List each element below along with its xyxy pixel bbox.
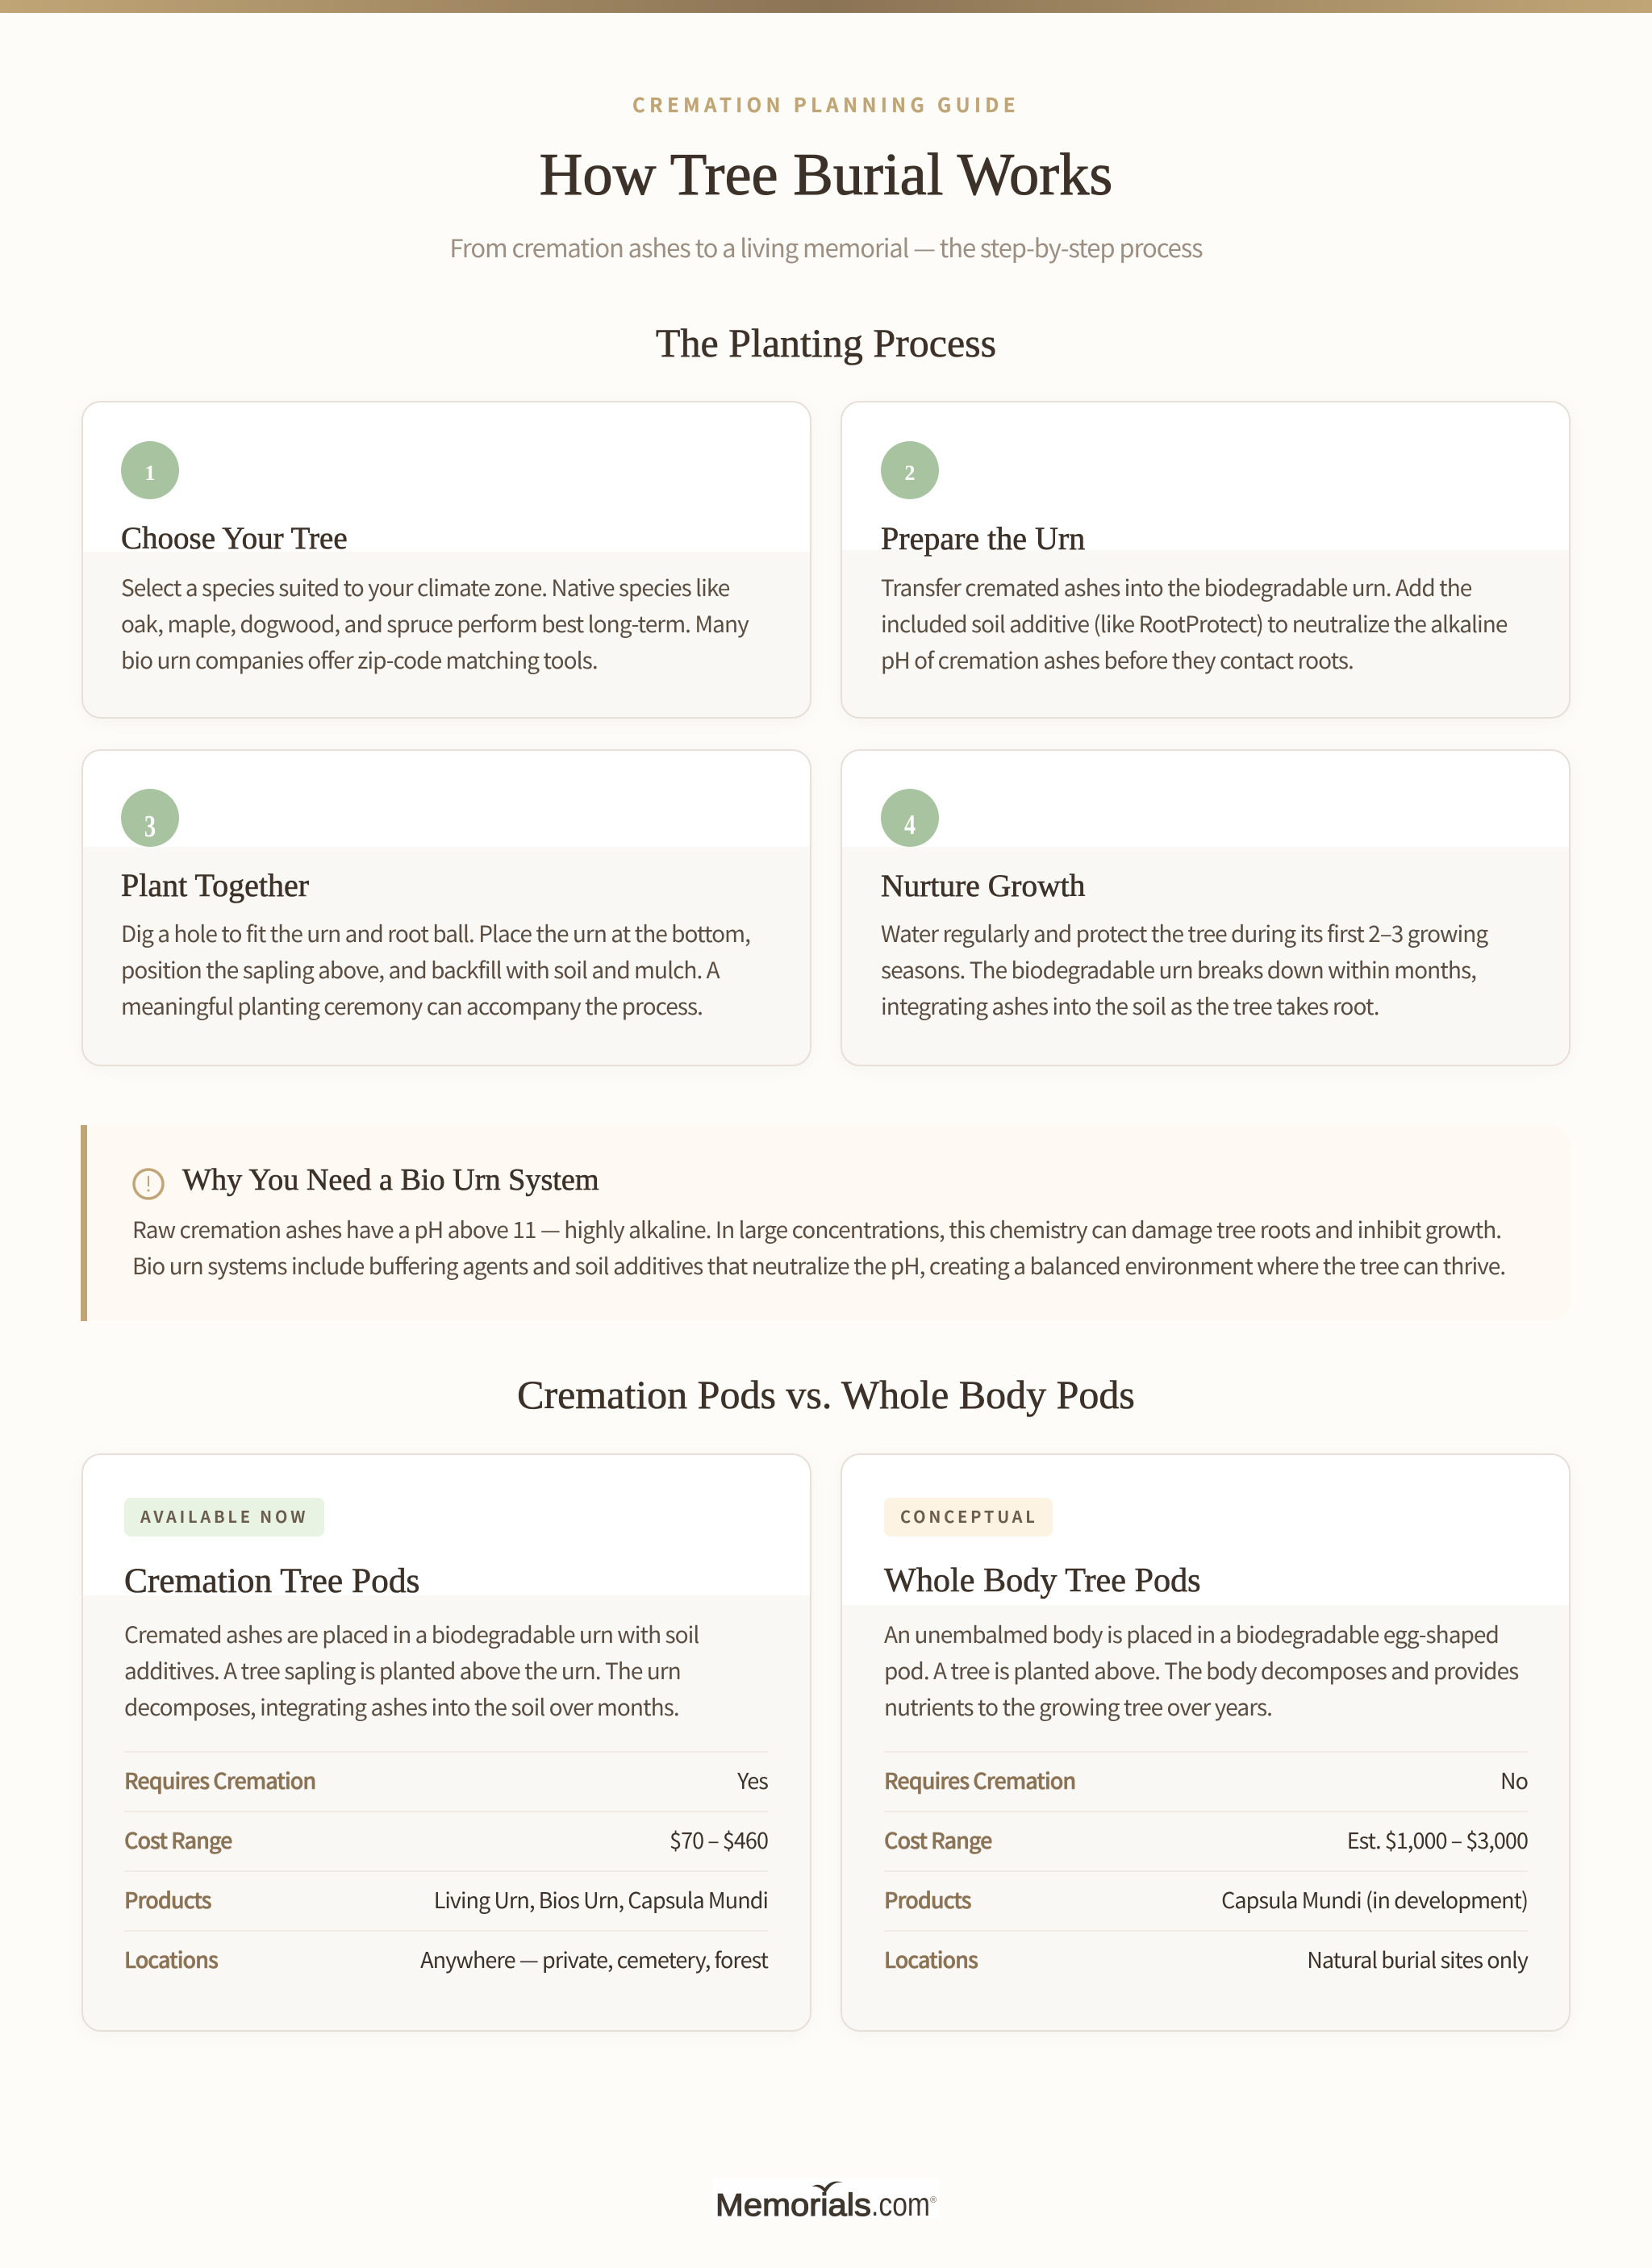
whole body pods data table: Products — [884, 1883, 971, 1915]
cremation pods data table — [124, 1751, 768, 1974]
cremation pods text: decomposes, integrating ashes into the soil over months. — [124, 1691, 679, 1723]
step 1 heading: Choose Your Tree — [121, 521, 348, 556]
cremation pods text — [124, 1618, 699, 1723]
cremation pods data table: Yes — [737, 1764, 768, 1795]
step number 4: 4 — [904, 809, 916, 840]
heading: the planting process: The Planting Process — [656, 320, 996, 365]
panel: step 2 — [841, 401, 1571, 719]
step 4 text — [881, 917, 1488, 1022]
step 1 text — [121, 571, 749, 676]
step number 3 — [121, 789, 179, 847]
callout text — [132, 1213, 1505, 1282]
step 2 text: included soil additive (like RootProtect) to neutralize the alkaline — [881, 607, 1507, 640]
whole body pods data table: Est. $1,000 – $3,000 — [1347, 1824, 1528, 1855]
callout: why you need a bio urn system — [81, 1125, 1571, 1321]
step 3 text: Dig a hole to fit the urn and root ball. Place the urn at the bottom, — [121, 917, 750, 949]
cremation pods data table: Products — [124, 1883, 211, 1915]
step number 3: 3 — [144, 810, 156, 844]
whole body pods heading: Whole Body Tree Pods — [884, 1561, 1201, 1599]
cremation pods data table: $70 – $460 — [670, 1824, 768, 1855]
cremation pods data table: Locations — [124, 1943, 218, 1974]
step 2 text: pH of cremation ashes before they contact roots. — [881, 644, 1354, 676]
icon: exclamation circle — [132, 1168, 165, 1200]
step 3 text — [121, 917, 750, 1022]
logo: memorials.com: ® — [930, 2195, 937, 2205]
cremation pods data table: Cost Range — [124, 1824, 232, 1855]
panel: cremation tree pods — [81, 1453, 811, 2032]
whole body pods data table: No — [1500, 1764, 1528, 1795]
whole body pods text: An unembalmed body is placed in a biodegradable egg-shaped — [884, 1618, 1499, 1650]
badge: conceptual: CONCEPTUAL — [900, 1504, 1038, 1528]
whole body pods text: nutrients to the growing tree over years. — [884, 1691, 1272, 1723]
cremation pods heading: Cremation Tree Pods — [124, 1561, 419, 1600]
badge: available now: AVAILABLE NOW — [140, 1504, 308, 1528]
step 4 text: Water regularly and protect the tree during its first 2–3 growing — [881, 917, 1487, 949]
cremation pods text: additives. A tree sapling is planted above the urn. The urn — [124, 1654, 681, 1686]
whole body pods data table — [884, 1751, 1528, 1974]
step 3 text: position the sapling above, and backfill with soil and mulch. A — [121, 953, 720, 986]
callout heading: Why You Need a Bio Urn System — [182, 1163, 599, 1197]
step number 1: 1 — [145, 461, 155, 485]
step 1 text: Select a species suited to your climate zone. Native species like — [121, 571, 729, 603]
whole body pods data table: Requires Cremation — [884, 1764, 1075, 1795]
step 3 heading: Plant Together — [121, 867, 309, 903]
step 3 text: meaningful planting ceremony can accompany the process. — [121, 990, 703, 1022]
whole body pods text — [884, 1618, 1518, 1723]
eyebrow: CREMATION PLANNING GUIDE — [632, 90, 1020, 118]
title: How Tree Burial Works — [540, 142, 1112, 208]
step number 1 — [121, 441, 179, 499]
step 4 heading: Nurture Growth — [881, 868, 1085, 903]
badge: conceptual — [884, 1498, 1053, 1536]
step 1 text: oak, maple, dogwood, and spruce perform best long-term. Many — [121, 607, 749, 640]
whole body pods data table: Capsula Mundi (in development) — [1221, 1883, 1528, 1915]
cremation pods data table: Living Urn, Bios Urn, Capsula Mundi — [434, 1883, 768, 1915]
step 4 text: seasons. The biodegradable urn breaks down within months, — [881, 953, 1476, 986]
cremation pods data table: Anywhere — private, cemetery, forest — [420, 1943, 768, 1974]
callout text: Raw cremation ashes have a pH above 11 — highly alkaline. In large concentrations, this chemistry can damage tree roots and inhibit growth. — [132, 1213, 1501, 1245]
panel: step 4 — [841, 749, 1571, 1066]
top gradient bar — [0, 0, 1652, 13]
step 4 text: integrating ashes into the soil as the tree takes root. — [881, 990, 1379, 1022]
subtitle: From cremation ashes to a living memorial — the step-by-step process — [449, 228, 1203, 265]
step 2 text — [881, 571, 1507, 676]
step 2 text: Transfer cremated ashes into the biodegradable urn. Add the — [881, 571, 1471, 603]
callout text: Bio urn systems include buffering agents and soil additives that neutralize the pH, creating a balanced environment where the tree can thrive. — [132, 1249, 1505, 1282]
heading: pods comparison: Cremation Pods vs. Whole Body Pods — [517, 1372, 1135, 1417]
panel: step 1 — [81, 401, 811, 719]
panel: step 3 — [81, 749, 811, 1066]
cremation pods data table: Requires Cremation — [124, 1764, 315, 1795]
step number 2 — [881, 441, 939, 499]
step number 2: 2 — [905, 461, 915, 485]
step 1 text: bio urn companies offer zip-code matching tools. — [121, 644, 598, 676]
step 2 heading: Prepare the Urn — [881, 520, 1085, 557]
whole body pods data table: Cost Range — [884, 1824, 991, 1855]
badge: available now — [124, 1498, 324, 1536]
cremation pods text: Cremated ashes are placed in a biodegradable urn with soil — [124, 1618, 699, 1650]
whole body pods data table: Natural burial sites only — [1307, 1943, 1528, 1974]
step number 4 — [881, 789, 939, 847]
whole body pods text: pod. A tree is planted above. The body decomposes and provides — [884, 1654, 1518, 1686]
whole body pods data table: Locations — [884, 1943, 978, 1974]
panel: whole body tree pods — [841, 1453, 1571, 2032]
logo: memorials.com — [715, 2181, 937, 2219]
